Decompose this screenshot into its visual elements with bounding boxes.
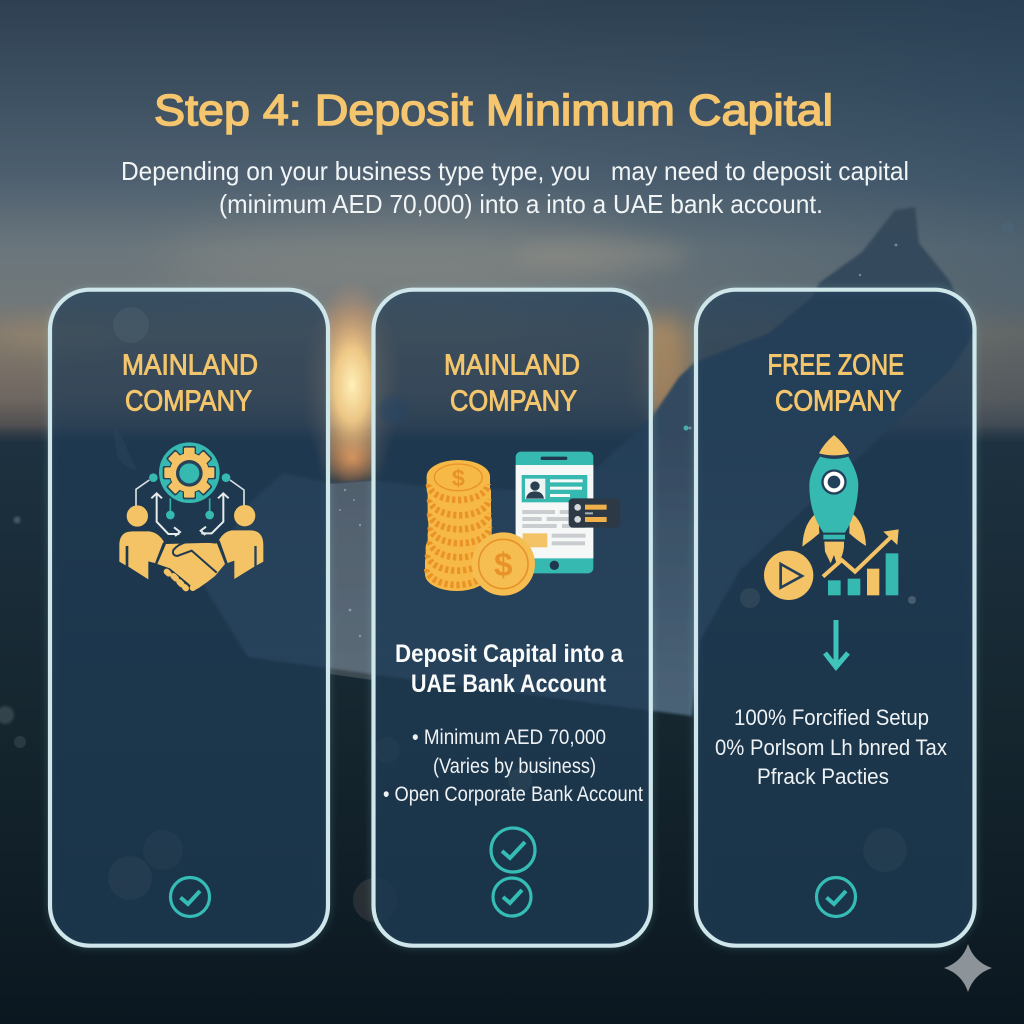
icon: sparkle bbox=[944, 944, 992, 992]
icon: rocket and growth chart bbox=[764, 435, 899, 600]
icon: handshake with gear bbox=[119, 442, 263, 588]
arrow: down bbox=[825, 620, 848, 667]
heading: free zone company bbox=[768, 350, 904, 418]
icon: check mark bbox=[816, 878, 856, 916]
subtitle text: Depending on your business type type, you may need to deposit capital bbox=[121, 156, 909, 186]
icon: check mark bbox=[170, 878, 210, 916]
heading: mainland company: MAINLAND bbox=[122, 350, 258, 382]
icon: check marks bbox=[491, 828, 535, 916]
panel: mainland company (middle) bbox=[374, 290, 651, 946]
heading: free zone company: FREE ZONE bbox=[768, 350, 904, 382]
subtitle text: (minimum AED 70,000) into a into a UAE bank account. bbox=[219, 189, 823, 219]
subtitle text bbox=[121, 156, 909, 219]
phone bbox=[516, 452, 593, 573]
text: deposit details: (Varies by business) bbox=[433, 755, 596, 778]
panel: mainland company (left) bbox=[50, 290, 328, 946]
text: deposit details: • Open Corporate Bank Account bbox=[383, 783, 643, 806]
coin stack bbox=[425, 460, 535, 596]
text: deposit heading: UAE Bank Account bbox=[411, 670, 607, 698]
text: free zone details: Pfrack Pacties bbox=[757, 764, 889, 789]
coin stack: $ bbox=[452, 465, 465, 491]
heading: mainland company: COMPANY bbox=[125, 386, 252, 418]
text: free zone details: 0% Porlsom Lh bnred Tax bbox=[715, 735, 947, 760]
text: free zone details bbox=[715, 705, 947, 789]
heading: mainland company: COMPANY bbox=[450, 386, 577, 418]
text: deposit heading bbox=[395, 640, 624, 698]
text: deposit details: • Minimum AED 70,000 bbox=[412, 726, 606, 749]
title: Step 4: Deposit Minimum Capital bbox=[154, 86, 833, 135]
small badge bbox=[569, 498, 620, 528]
heading: mainland company: MAINLAND bbox=[444, 350, 580, 382]
heading: free zone company: COMPANY bbox=[775, 386, 902, 418]
text: deposit details bbox=[383, 726, 643, 806]
panel: free zone company (right) bbox=[696, 290, 974, 946]
heading: mainland company bbox=[122, 350, 258, 418]
text: deposit heading: Deposit Capital into a bbox=[395, 640, 624, 668]
text: free zone details: 100% Forcified Setup bbox=[734, 705, 929, 730]
heading: mainland company bbox=[444, 350, 580, 418]
coin stack: $ bbox=[494, 547, 513, 584]
icon: coin stack and phone bbox=[425, 452, 620, 596]
